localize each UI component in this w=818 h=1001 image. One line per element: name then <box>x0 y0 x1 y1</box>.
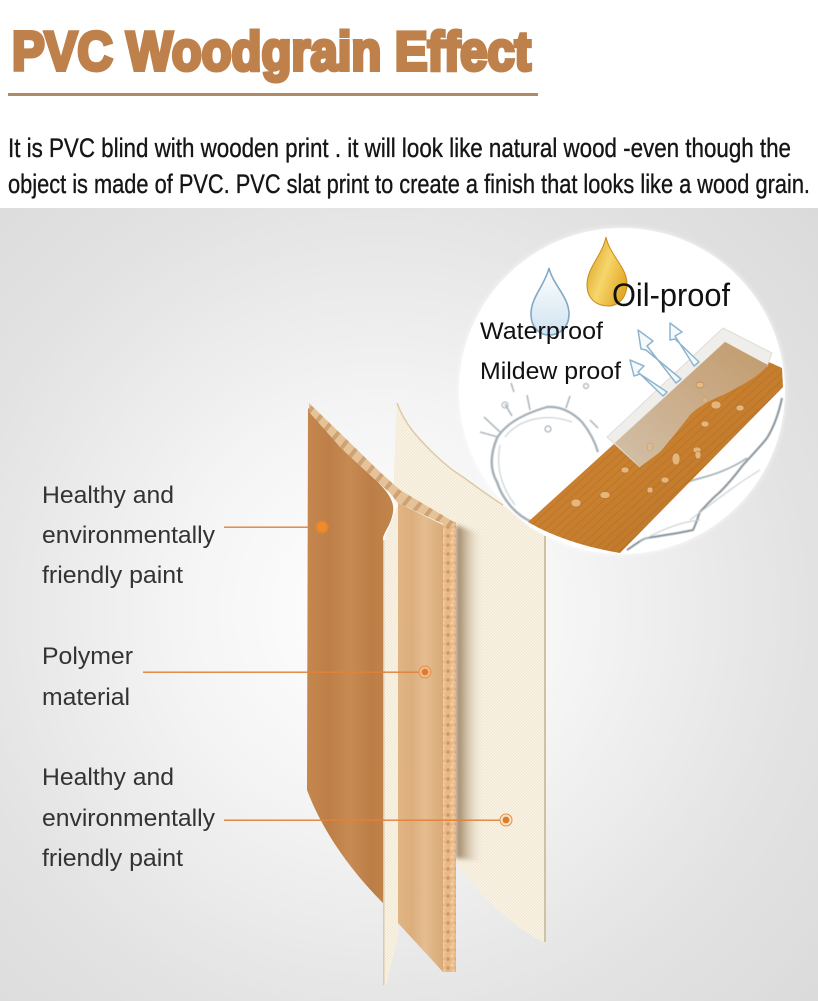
callout labels <box>480 277 730 385</box>
label: healthy paint top <box>42 482 215 589</box>
label: polymer material: Polymer <box>42 643 133 670</box>
title: PVC Woodgrain Effect <box>12 20 531 82</box>
label: polymer material <box>42 643 133 711</box>
callout labels: Waterproof <box>480 318 603 345</box>
callout labels: Oil-proof <box>612 277 730 313</box>
circle callout: waterproof and oil-proof <box>458 227 786 555</box>
icon: water splash ring <box>480 383 782 550</box>
panel: product background <box>0 208 818 1001</box>
label: polymer material: material <box>42 684 130 711</box>
back cream layer <box>394 403 545 942</box>
label: healthy paint top: friendly paint <box>42 562 183 589</box>
label: healthy paint bottom: Healthy and <box>42 764 174 791</box>
arrows <box>630 323 699 396</box>
water splash right <box>627 398 782 550</box>
leader line: polymer <box>143 666 431 678</box>
icon: water drop <box>531 268 569 335</box>
crumb edge <box>443 520 456 972</box>
label: healthy paint bottom: environmentally <box>42 805 215 832</box>
middle wood layer <box>398 503 443 972</box>
water beads on plank <box>571 382 744 507</box>
label: healthy paint top: environmentally <box>42 522 215 549</box>
top cut edge <box>309 403 454 527</box>
leader line: bottom paint <box>224 814 512 826</box>
film: protective layer <box>607 328 772 467</box>
icon: oil drop <box>587 237 627 306</box>
front dark wood layer <box>307 408 393 903</box>
label: healthy paint bottom <box>42 764 215 872</box>
leader line: top paint <box>224 521 328 533</box>
label: healthy paint bottom: friendly paint <box>42 845 183 872</box>
label: healthy paint top: Healthy and <box>42 482 174 509</box>
description text <box>8 133 810 199</box>
cast shadow <box>456 525 484 862</box>
material layers illustration <box>307 403 546 985</box>
title underline <box>8 93 538 96</box>
header background <box>0 0 818 208</box>
board: wood plank <box>528 342 783 553</box>
callout labels: Mildew proof <box>480 358 621 385</box>
thin cream layer <box>384 505 398 985</box>
